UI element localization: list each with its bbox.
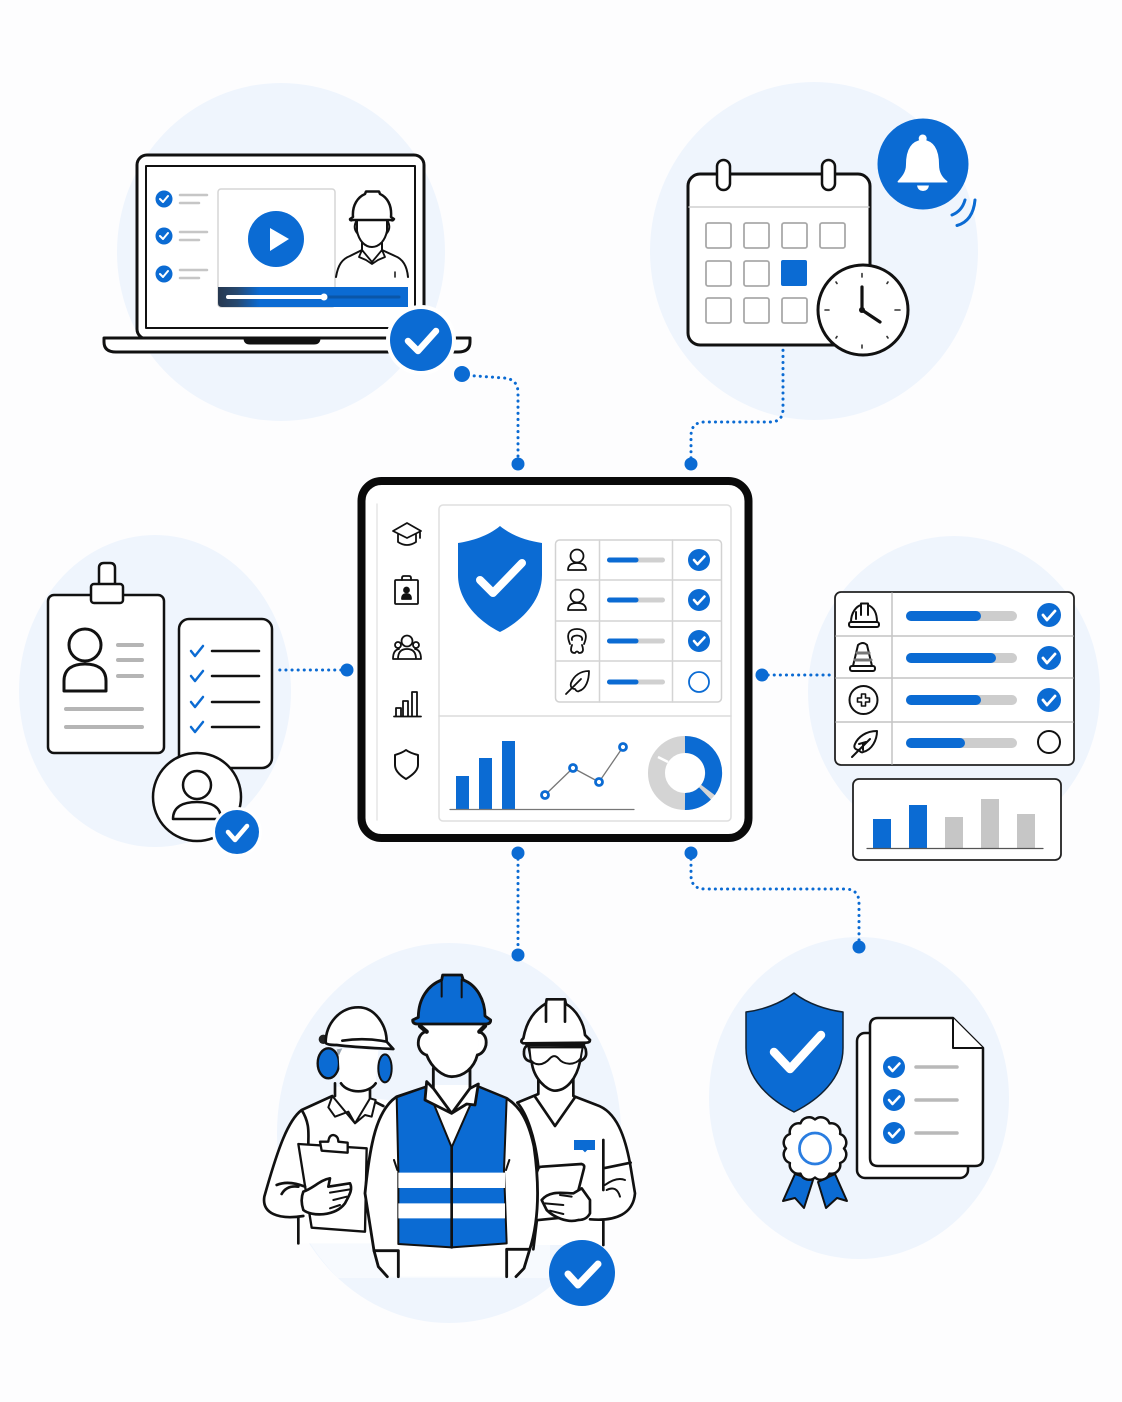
status table	[556, 540, 722, 702]
panel: laptop training video	[104, 155, 470, 375]
laptop body	[104, 155, 470, 352]
small bar chart	[853, 779, 1061, 860]
panel: calendar with reminder	[688, 118, 975, 355]
checklist on screen	[156, 190, 207, 282]
worker: centre with hi-vis vest	[365, 975, 538, 1277]
row icons	[849, 604, 879, 757]
panel: central dashboard tablet	[362, 481, 748, 838]
ID card	[48, 563, 164, 753]
icon: clock	[818, 265, 908, 355]
line chart	[542, 744, 626, 798]
worker: left with clipboard and ear protection	[264, 1007, 393, 1243]
checklist document	[179, 619, 272, 768]
shield with check	[458, 526, 542, 632]
panel: compliance table with bar chart	[835, 592, 1074, 860]
row icons	[566, 550, 589, 694]
panel: team of workers	[264, 975, 635, 1277]
icon: award ribbon	[783, 1117, 847, 1208]
worker: right with tablet and goggles	[510, 999, 635, 1249]
panel: ID card and checklist	[48, 563, 272, 857]
large shield	[746, 993, 843, 1112]
donut chart	[656, 744, 714, 802]
status table	[835, 592, 1074, 765]
bar chart	[450, 741, 634, 810]
icon: check badge	[386, 305, 456, 375]
icon: verified user	[153, 753, 262, 857]
document stack	[857, 1018, 983, 1178]
video player	[218, 189, 335, 307]
calendar	[688, 160, 870, 345]
icon: notification bell	[878, 118, 975, 226]
icon: team check badge	[549, 1240, 615, 1306]
connectors: dotted lines between dashboard and panels	[275, 348, 866, 962]
sidebar icons	[393, 523, 421, 779]
instructor worker	[336, 192, 408, 277]
panel: certification and documents	[746, 993, 983, 1208]
progress bar	[218, 287, 408, 307]
